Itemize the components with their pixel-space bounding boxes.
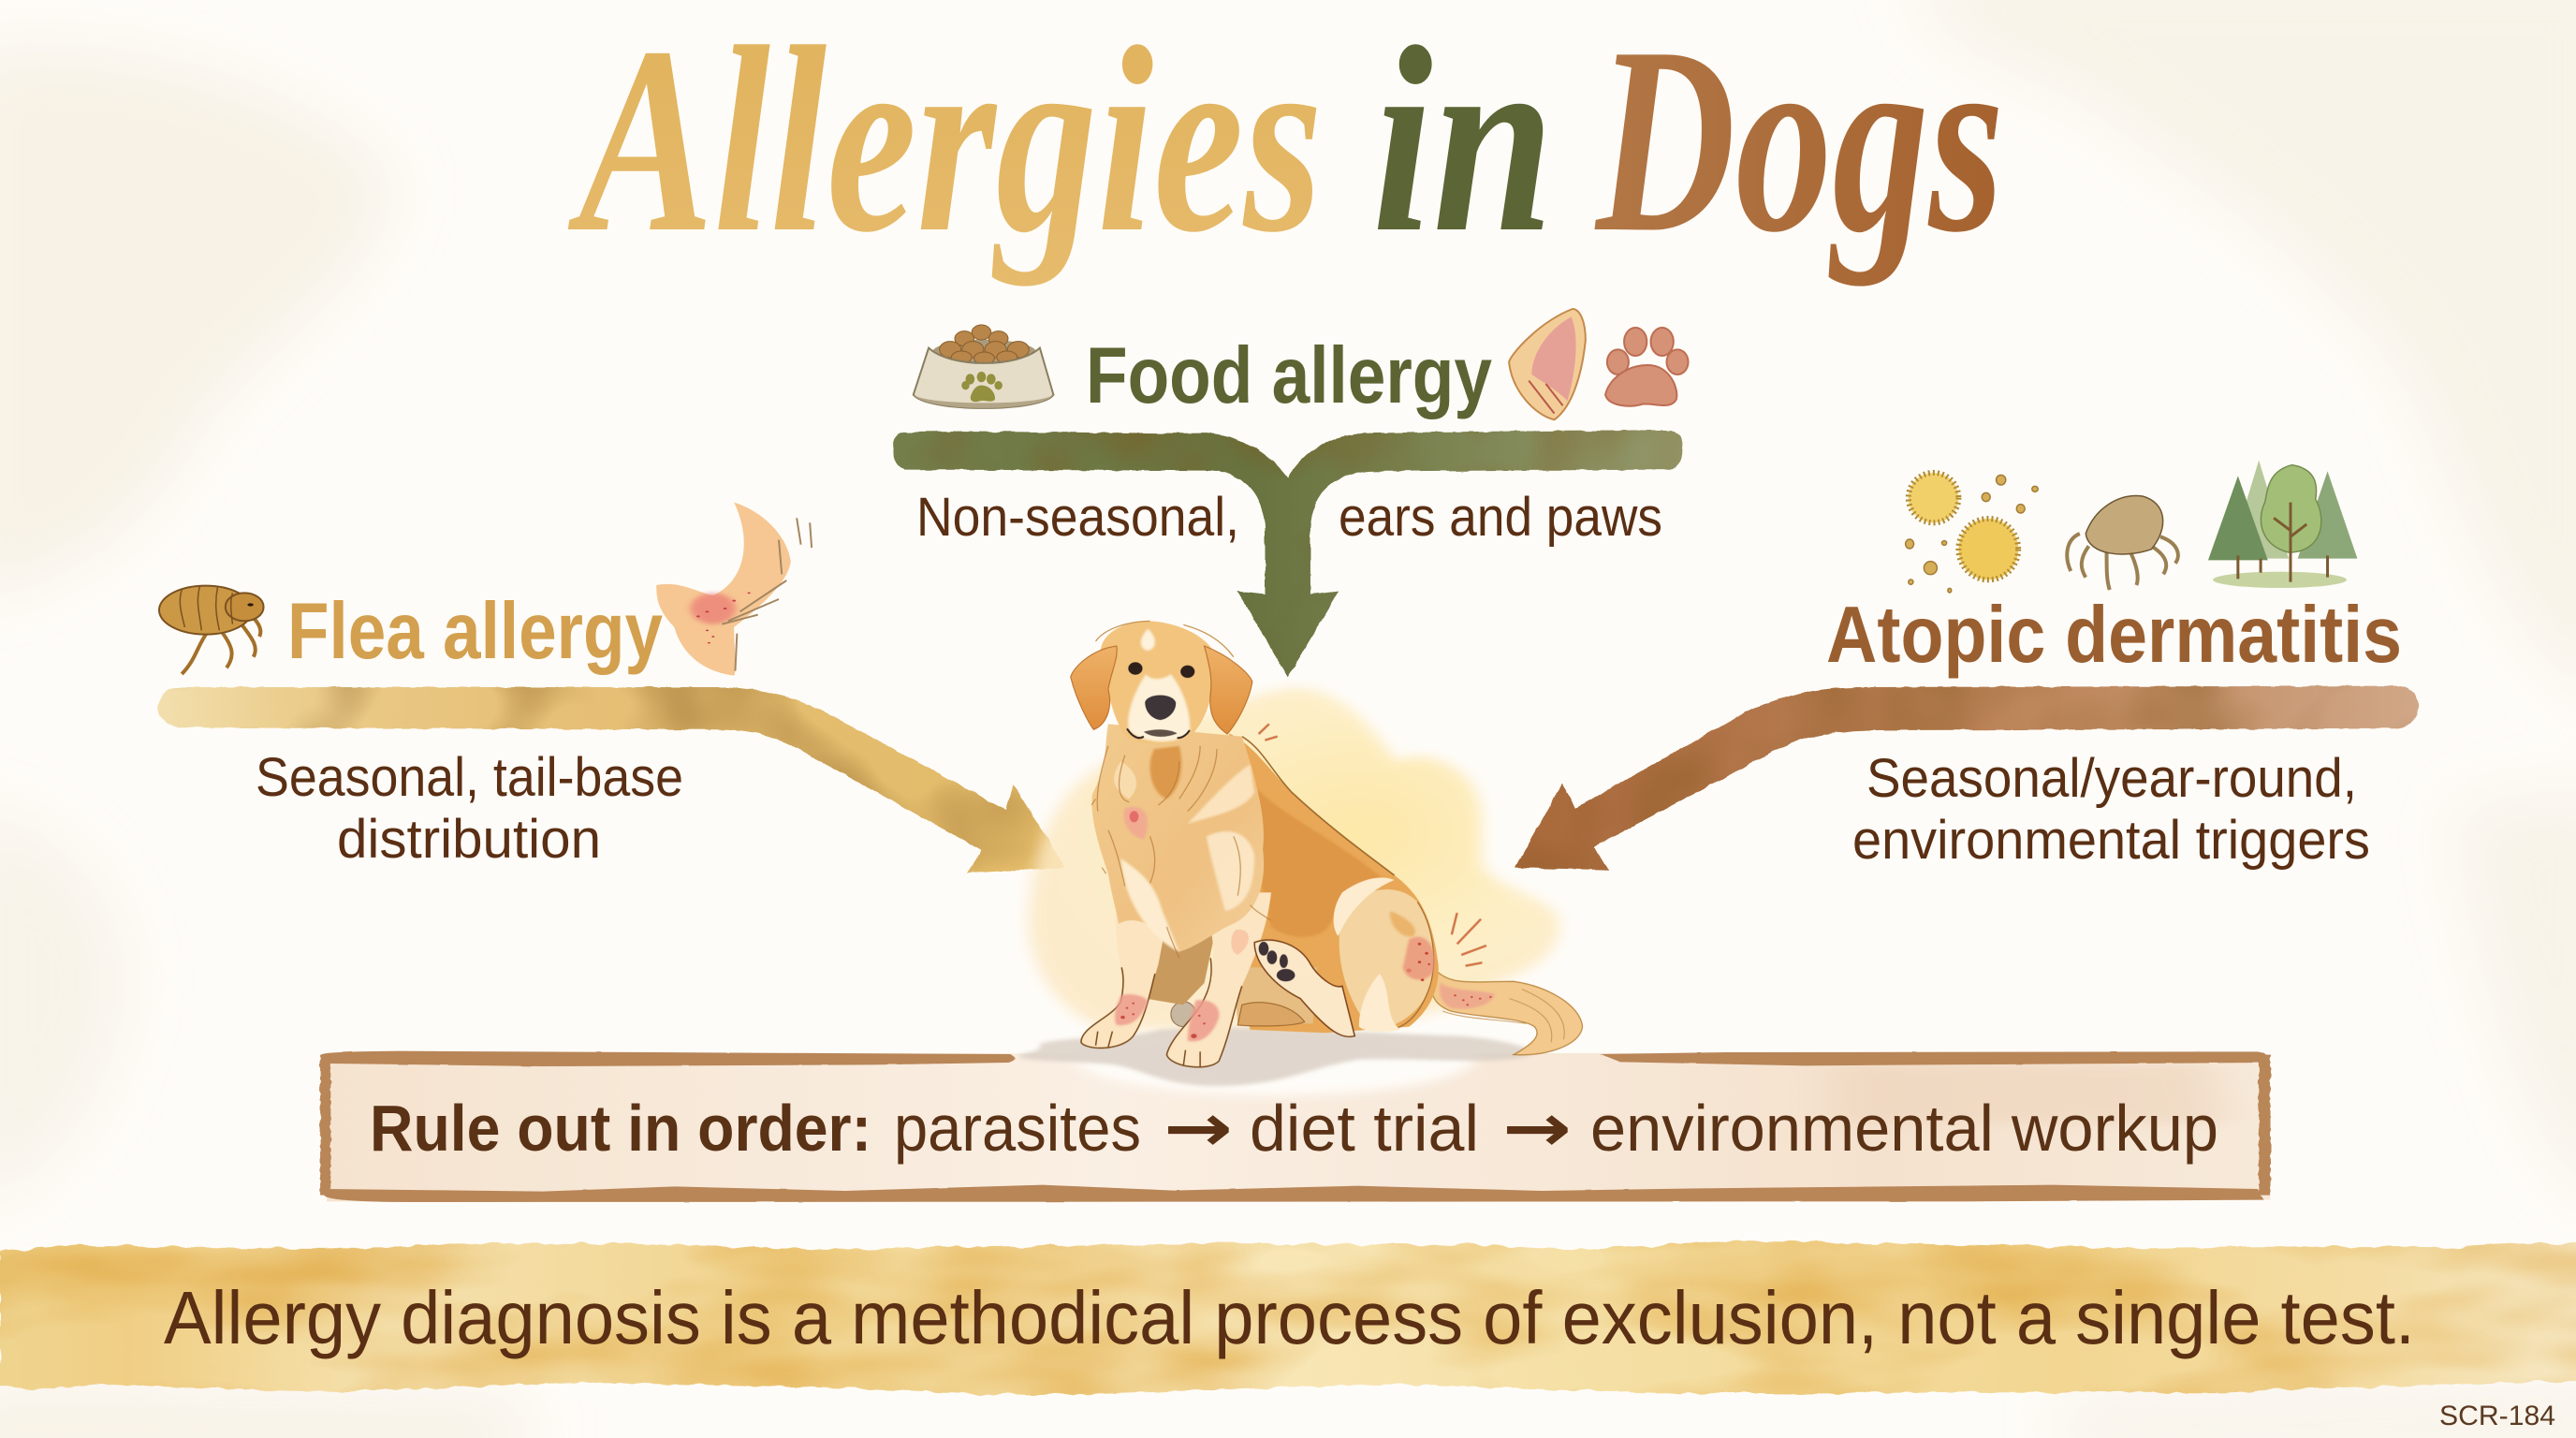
between legs [1146, 924, 1217, 1005]
halo over box [1075, 1020, 1476, 1095]
title: Dogs [1593, 0, 2004, 287]
icon: paw [1605, 328, 1689, 406]
right ear [1205, 646, 1252, 734]
panel: flea allergy [158, 503, 1065, 873]
front leg left [1081, 899, 1171, 1048]
arrow: flea allergy [158, 687, 1065, 873]
panel: atopic dermatitis [1515, 461, 2419, 871]
text: rule out in order: parasites [894, 1092, 1141, 1165]
text: rule out in order: → [1164, 1090, 1233, 1167]
label: non-seasonal: Non-seasonal, [916, 487, 1239, 548]
text: atopic detail: environmental triggers [1852, 810, 2370, 871]
text: rule out in order: Rule out in order: [370, 1092, 871, 1165]
arrow: food allergy [893, 431, 1682, 677]
text: flea detail [256, 747, 683, 870]
icon: dust mite [2067, 496, 2178, 590]
raised hind leg [1254, 940, 1354, 1036]
text: rule out in order: → [1502, 1090, 1572, 1167]
text: takeaway: Allergy diagnosis is a methodical process of exclusion, not a single test. [164, 1276, 2415, 1359]
text: atopic detail [1852, 748, 2370, 871]
icon: pollen [1906, 473, 2038, 593]
text: flea detail: distribution [337, 809, 601, 870]
body [1217, 733, 1439, 1033]
tail [1431, 971, 1583, 1055]
text: rule out in order: environmental workup [1590, 1092, 2218, 1165]
title: in [1372, 0, 1554, 287]
heading: flea allergy: Flea allergy [287, 587, 663, 676]
illustration: golden retriever [1018, 621, 1583, 1095]
panel: rule-out box [320, 1051, 2271, 1202]
yellow wash [1029, 688, 1559, 1030]
icon: dog ear [1509, 309, 1586, 419]
text: flea detail: Seasonal, tail-base [256, 747, 683, 808]
rear paw behind [1171, 1002, 1196, 1027]
mouth [1144, 729, 1178, 737]
chest and mane [1091, 724, 1264, 952]
title [565, 0, 2004, 287]
nose [1145, 696, 1176, 720]
text: rule out in order: diet trial [1250, 1092, 1479, 1165]
label: ears and paws: ears and paws [1339, 487, 1662, 548]
left ear [1071, 646, 1117, 729]
text: atopic detail: Seasonal/year-round, [1866, 748, 2357, 809]
eyes [1128, 662, 1143, 675]
panel: food allergy [893, 309, 1689, 677]
icon: trees [2208, 461, 2357, 588]
banner: key takeaway [0, 1240, 2576, 1396]
icon: food bowl [914, 325, 1053, 408]
text: rule out in order [370, 1090, 2218, 1167]
head [1100, 621, 1218, 744]
slide code: SCR-184 [2439, 1401, 2555, 1431]
heading: atopic dermatitis: Atopic dermatitis [1826, 591, 2402, 680]
icon: flea [159, 586, 264, 674]
arrow: atopic dermatitis [1515, 686, 2419, 870]
haunch [1339, 889, 1434, 1032]
heading: food allergy: Food allergy [1086, 331, 1492, 420]
scratch marks [1259, 724, 1486, 966]
title: Allergies [565, 0, 1323, 287]
front leg right [1166, 892, 1271, 1067]
icon: itchy tail [656, 503, 812, 676]
ground shadow [1018, 1028, 1531, 1086]
